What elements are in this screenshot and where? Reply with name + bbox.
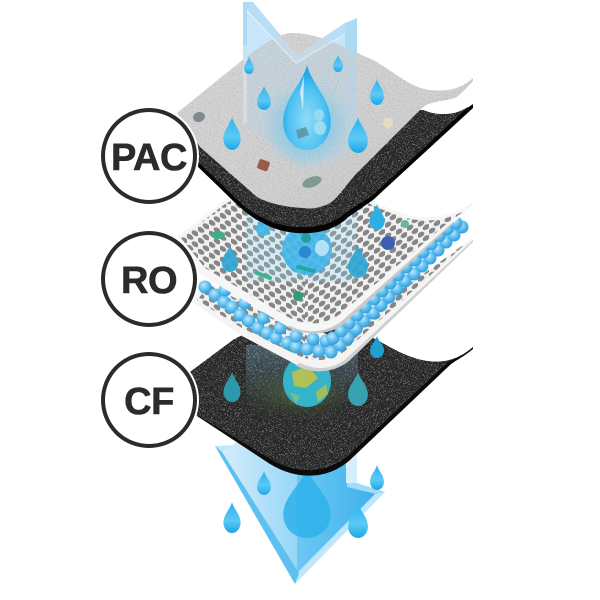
RO sheet: lower perforated membrane bbox=[193, 238, 473, 371]
arrow: top inflow, behind grey sheet bbox=[243, 2, 357, 65]
blue sphere filter media bbox=[198, 216, 468, 358]
badge: PAC: PAC bbox=[111, 137, 187, 179]
grey stone bbox=[192, 110, 206, 124]
badge: CF: CF bbox=[124, 381, 174, 423]
beige stone bbox=[383, 118, 393, 128]
PAC black backing sheet bbox=[190, 104, 473, 233]
long green stone bbox=[301, 174, 323, 190]
PAC grey sheet bbox=[177, 33, 473, 208]
large multicolour drop bbox=[283, 355, 331, 407]
contaminant ball bbox=[381, 236, 395, 250]
large water drop bbox=[283, 65, 331, 150]
badge: PAC bbox=[99, 106, 199, 206]
CF sheet: black carbon fibre layer bbox=[190, 324, 473, 476]
RO sheet: upper perforated membrane bbox=[177, 185, 473, 334]
arrow stem overlay on grey sheet bbox=[243, 2, 357, 170]
badge: CF bbox=[99, 350, 199, 450]
water drops and contaminants on RO sheet bbox=[211, 204, 409, 301]
arrow: bottom outflow bbox=[215, 430, 385, 584]
badge: RO bbox=[99, 229, 199, 329]
drops: bottom outflow bbox=[223, 465, 384, 538]
badge: RO: RO bbox=[121, 260, 177, 302]
large water sphere bbox=[282, 225, 332, 275]
brown stone bbox=[257, 159, 270, 172]
arrow stem passing through RO sheet bbox=[246, 212, 356, 282]
large water drop bbox=[283, 468, 331, 538]
water drops and stones on PAC sheet bbox=[192, 55, 393, 190]
water drops on CF sheet bbox=[223, 336, 384, 407]
